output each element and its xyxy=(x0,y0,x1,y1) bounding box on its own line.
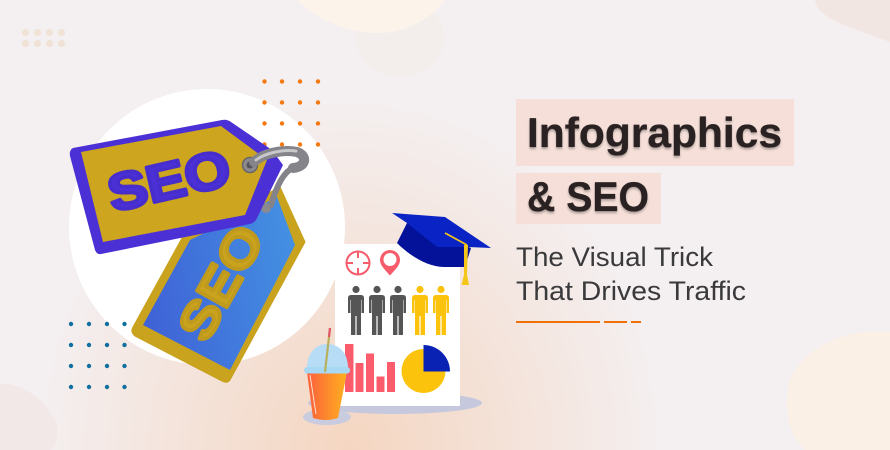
decorative dots: orange xyxy=(262,79,320,147)
subtitle: That Drives Traffic xyxy=(516,276,746,306)
paper shadow xyxy=(308,392,482,414)
icon: graduation cap xyxy=(392,213,491,285)
decorative dots: top left xyxy=(22,29,65,47)
subtitle: The Visual Trick xyxy=(516,242,714,272)
infographic sheet xyxy=(335,244,460,406)
title highlight: & SEO xyxy=(516,173,661,224)
icon: target xyxy=(346,252,370,274)
icon: drink cup xyxy=(303,328,351,425)
decorative dots: blue xyxy=(69,322,127,389)
icon: location pin xyxy=(380,250,400,276)
title line 2: & SEO xyxy=(527,173,649,220)
title highlight: Infographics xyxy=(516,99,794,166)
bar chart xyxy=(345,344,395,392)
underline accent xyxy=(516,321,641,323)
subtitle xyxy=(516,242,746,306)
upper tag label: SEO xyxy=(102,139,236,224)
upper SEO tag xyxy=(70,120,283,254)
title line 1: Infographics xyxy=(527,109,782,156)
lower eyelet xyxy=(261,203,271,213)
eyelet xyxy=(242,158,258,172)
pie chart xyxy=(402,345,450,393)
people icons xyxy=(348,286,449,335)
lower SEO tag xyxy=(132,187,305,382)
white circle xyxy=(69,89,345,365)
lower tag label: SEO xyxy=(167,216,275,350)
metal ring xyxy=(254,150,304,205)
